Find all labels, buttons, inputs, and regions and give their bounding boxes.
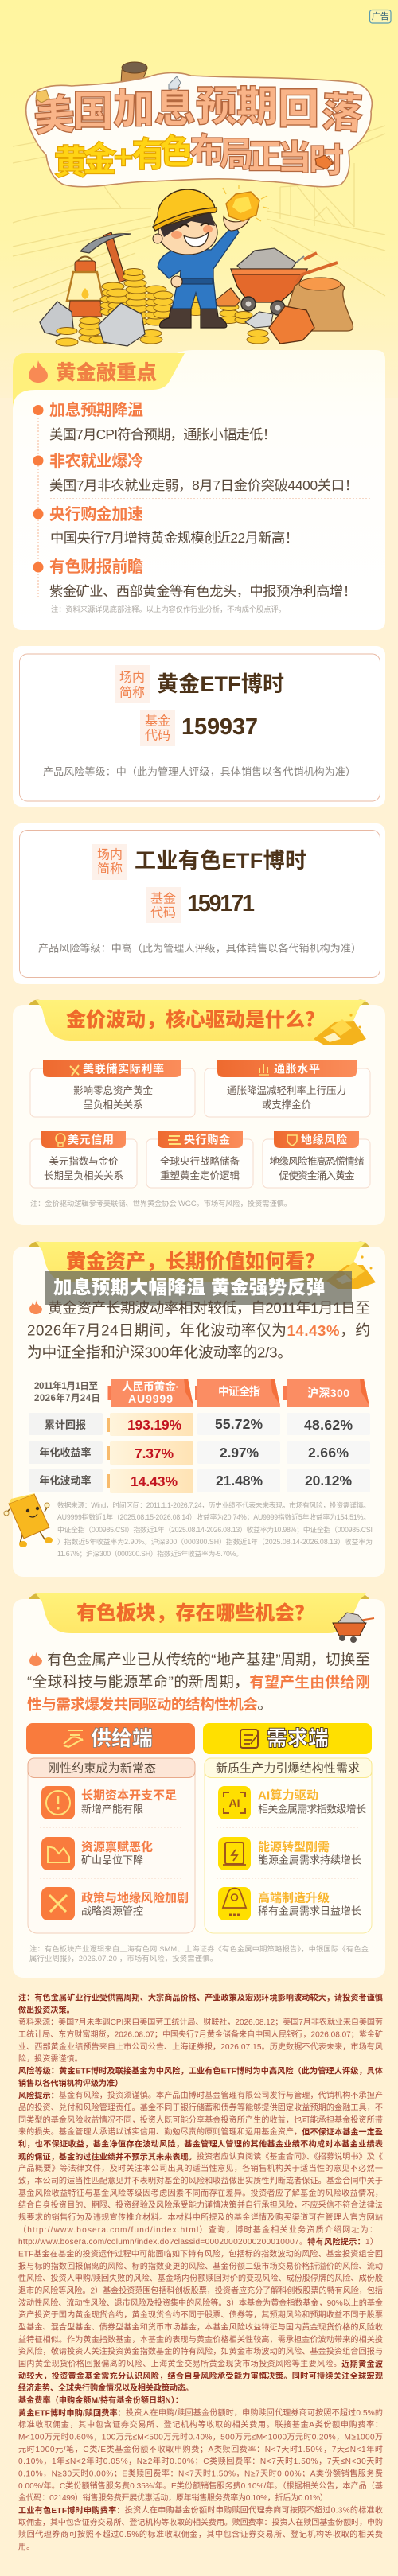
banner: nonferrous opportunities: 有色板块，存在哪些机会？	[76, 1601, 314, 1625]
ad tag	[369, 10, 391, 23]
demand item 2: 能源转型刚需	[258, 1839, 330, 1854]
driver: geopolitical risk: 地缘风险推高恐慌情绪	[269, 1155, 365, 1167]
row: annualized return: 7.37%	[135, 1446, 174, 1461]
row: annualized volatility: 21.48%	[216, 1473, 263, 1488]
short name: 场内	[119, 670, 145, 684]
title line 2	[54, 132, 344, 182]
driver: real interest rate: 影响零息资产黄金	[73, 1084, 153, 1096]
footer: disclosures and risk notes: 益特征相似。作为黄金指数基金，本基金的表现与黄金价格相关性较高，需承担金价波动带来的相关投	[18, 2334, 383, 2344]
driver: inflation	[205, 1060, 370, 1117]
title line 1: 息	[154, 86, 196, 132]
panel: long-term gold value	[4, 1242, 385, 1577]
driver: geopolitical risk: 促使资金涌入黄金	[279, 1169, 355, 1181]
row: cumulative return: 193.19%	[127, 1417, 181, 1433]
demand column	[203, 1723, 372, 1933]
driver: inflation: 通胀水平	[274, 1063, 320, 1076]
ad tag: 广告	[372, 11, 389, 21]
supply header	[26, 1723, 195, 1754]
icon: flame	[29, 1652, 42, 1666]
row: cumulative return	[29, 1413, 370, 1436]
footer: disclosures and risk notes: 规要求的销售行为及违规宣传推介材料。本材料中所提及的基金详情及购买渠道可在管理人官方网站	[18, 2212, 383, 2223]
demand list panel	[205, 1758, 372, 1933]
hero title sticker	[26, 62, 372, 187]
driver: central bank gold buying	[146, 1131, 253, 1188]
demand item 3: 高端制造升级	[258, 1890, 330, 1905]
row: annualized volatility: 14.43%	[131, 1473, 178, 1489]
supply list panel	[28, 1758, 195, 1933]
gold nugget	[223, 185, 269, 221]
footer: disclosures and risk notes: 国内黄金现货价格回报偏离的风险、上海黄金交易所黄金现货市场投资风险等主要风险。近期黄金波	[18, 2358, 383, 2369]
footer: disclosures and risk notes: 波动性风险、流动性风险、退市风险及投资集中的风险等。3）本基金为黄金指数基金，90%以上的基金	[18, 2298, 383, 2308]
title line 1: 落	[321, 90, 364, 138]
table header: CSI All Share	[195, 1379, 280, 1407]
supply list panel: 刚性约束成为新常态	[48, 1761, 156, 1776]
short name: 简称	[119, 686, 145, 700]
driver: central bank gold buying: 央行购金	[184, 1133, 230, 1146]
paragraph: structural opportunity: “全球科技与能源革命”的新周期，有望产生由供给刚	[27, 1674, 370, 1690]
miner body	[158, 224, 239, 309]
row: cumulative return: 48.62%	[304, 1417, 353, 1433]
demand header	[203, 1723, 372, 1754]
row: annualized volatility	[29, 1469, 370, 1493]
key point 3	[49, 504, 298, 546]
table header: AU9999: 人民币黄金·	[122, 1380, 179, 1393]
key points heading tab	[13, 353, 185, 409]
title line 2: 色	[159, 134, 194, 172]
row: annualized volatility: 年化波动率	[40, 1475, 91, 1486]
icon: ore cart	[333, 1613, 374, 1643]
footer: disclosures and risk notes: ETF基金在基金的投资运作过程中可能面临如下特有风险，包括标的指数波动的风险、基金投资组合回	[18, 2248, 383, 2259]
silver rock right	[245, 312, 273, 328]
drivers note: 注：金价驱动逻辑参考美联储、世界黄金协会 WGC。市场有风险，投资需谨慎。	[30, 1199, 291, 1208]
miner hand on hip	[171, 276, 182, 287]
banner: gold price drivers: 金价波动，核心驱动是什么？	[66, 1008, 325, 1031]
short name: 工业有色ETF博时	[135, 849, 306, 873]
footer: disclosures and risk notes: 资风险，敬请投资人关注投资黄金指数基金的特有风险，如黄金市场波动的风险、基金投资组合回报与	[18, 2346, 383, 2356]
footer: disclosures and risk notes: 0.10%，N≥30天时0.00%；E类赎回费率：N<7天时1.50%，N≥7天时0.00%；A类份额销售服务费	[18, 2468, 383, 2479]
title line 2: 有	[132, 136, 166, 174]
title line 1	[32, 84, 364, 141]
boots	[159, 306, 227, 328]
footer: disclosures and risk notes: 动较大，投资黄金基金需充分认识风险，结合自身风险承受能力审慎决策。同时可持续关注全球宏观	[18, 2371, 383, 2381]
mine cart with ore	[231, 248, 317, 315]
demand item 2	[218, 1837, 361, 1870]
footer: disclosures and risk notes: （http://www.bosera.com/fund/index.html）查询，博时基金相关业务资质介绍网址为：	[18, 2224, 377, 2235]
driver: geopolitical risk: 地缘风险	[301, 1133, 347, 1146]
table source note: 11.67%；沪深300（000300.SH）指数近5年收益率为-5.70%。	[57, 1549, 243, 1558]
title line 1: 回	[278, 87, 319, 133]
demand header: 需求端	[267, 1726, 329, 1750]
fund code	[146, 887, 255, 923]
lantern	[67, 256, 103, 317]
table source note: AU9999指数近1年（2025.08.15-2026.08.14）收益率为20.74%；AU9999指数近5年收益率为154.51%。	[57, 1512, 370, 1521]
sticker decoration: sack of ore	[121, 62, 158, 88]
supply item 1: 长期资本开支不足	[81, 1788, 177, 1803]
nonferrous note: 属行业周报》，2026.07.20 ，市场有风险，投资需谨慎。	[29, 1954, 217, 1963]
footer: disclosures and risk notes: 来的损失。基金管理人承诺以诚实信用、勤勉尽责的原则管理和运用基金资产，但不保证本基金一定盈	[18, 2127, 383, 2137]
fund code: 代码	[150, 905, 176, 920]
table source note	[57, 1500, 373, 1558]
footer: disclosures and risk notes: 注：有色金属矿业行业受供需周期、大宗商品价格、产业政策及宏观环境影响波动较大，请投资者谨慎	[18, 1992, 383, 2003]
footer: disclosures and risk notes: 黄金ETF博时申购/赎回费率：投资人在申购/赎回基金份额时，申购赎回代理券商可按照不超过0.5%的	[18, 2407, 383, 2418]
footer: disclosures and risk notes: 取佣金，其中包含证券交易所、登记机构等收取的相关费用。赎回费率：投资人在赎回基金份额时，申购	[18, 2517, 383, 2527]
title line 2: 正	[248, 138, 282, 177]
demand item 1: AI	[229, 1796, 240, 1809]
footer: disclosures and risk notes: 产品概要》等法律文件，及时关注本公司出具的适当性意见，各销售机构关于适当性的意见不必然一	[18, 2163, 383, 2173]
footer: disclosures and risk notes: 0.10%，1年≤N<2年时0.05%，N≥2年时0.00%；C类赎回费率：N<7天时1.50%，7天≤N<30天时	[18, 2456, 383, 2466]
footer: disclosures and risk notes: 经济走势、全球央行购金情况以及相关政策动态。	[18, 2383, 193, 2393]
table source note: ）指数近5年收益率为2.90%。沪深300（000300.SH）指数近1年（2025.08.14-2026.08.13）收益率为	[57, 1537, 373, 1546]
fund code: 基金	[145, 714, 170, 729]
paragraph: structural opportunity: 有色金属产业已从传统的“地产基建”周期，切换至	[47, 1652, 370, 1667]
short name: 场内	[97, 848, 123, 862]
comparison table	[29, 1379, 370, 1493]
fund code: 159937	[181, 714, 258, 740]
banner: long-term gold value	[29, 1242, 369, 1282]
driver: real interest rate: 美联储实际利率	[83, 1063, 164, 1076]
table period label	[34, 1380, 100, 1403]
title line 1: 预	[196, 84, 237, 130]
panel: nonferrous opportunities	[13, 1593, 385, 1978]
video caption overlay	[45, 1271, 352, 1305]
icon: flame	[29, 1300, 42, 1314]
footer: disclosures and risk notes: 基金风险收益特征与基金风险等级因考虑因素不同而存在差异。投资者应了解基金的风险收益情况，	[18, 2188, 383, 2198]
supply item 3: 战略资源管控	[81, 1905, 143, 1917]
key point 4: 有色财报前瞻	[49, 558, 143, 576]
title line 2: 黄	[54, 144, 88, 182]
short name: 简称	[97, 862, 123, 877]
table header: CSI All Share: 中证全指	[218, 1385, 260, 1398]
footer: disclosures and risk notes: 型基金、混合型基金、债券型基金和货币市场基金，本基金风险收益特征与国内黄金现货价格的风险收	[18, 2321, 383, 2333]
footer: disclosures and risk notes: 基金费率（申购金额M/持有基金份额日期N）：	[18, 2395, 183, 2406]
timeline	[33, 405, 43, 597]
key point 3: 央行购金加速	[49, 504, 143, 523]
table header: AU9999: AU9999	[128, 1392, 173, 1405]
short name	[92, 844, 306, 880]
driver: real interest rate: 呈负相关关系	[83, 1099, 143, 1111]
key point 3: 中国央行7月增持黄金规模创近22月新高！	[50, 530, 298, 546]
table source note: 数据来源：Wind，时间区间：2011.1.1-2026.7.24，历史业绩不代表未来表现，市场有风险，投资需谨慎。	[57, 1500, 370, 1509]
footer: disclosures and risk notes: 业、西部黄金业绩预告来自上市公司公告、上海证券报，2026.07.15。历史数据不代表未来，市场有风	[18, 2041, 383, 2052]
footer: disclosures and risk notes	[18, 1992, 383, 2552]
pickaxe	[80, 232, 131, 282]
row: cumulative return: 累计回报	[45, 1419, 86, 1430]
footer: disclosures and risk notes: 报与标的指数回报偏离的风险、标的指数变更的风险、基金份额二级市场交易价格折溢价的风险、流动	[18, 2261, 383, 2271]
demand item 1	[218, 1786, 366, 1819]
title line 2: 时	[309, 142, 344, 181]
paragraph: gold volatility: 为中证全指和沪深300年化波动率的2/3。	[27, 1344, 292, 1360]
supply item 2: 矿山品位下降	[81, 1854, 143, 1866]
footer: disclosures and risk notes: 致，本公司的适当性匹配意见并不表明对基金的风险和收益做出实质性判断或者保证。基金合同中关于	[18, 2175, 383, 2186]
orange gem	[269, 306, 314, 344]
key point 2	[49, 452, 358, 493]
title line 1: 加	[113, 87, 154, 133]
silver rock centre	[99, 303, 145, 346]
paragraph: gold volatility	[27, 1300, 370, 1360]
row: annualized return	[29, 1441, 370, 1465]
footer: disclosures and risk notes: 元时1000元/笔，C类/E类基金份额不收取申购费；A类赎回费率：N<7天时1.50%，7天≤N<1年时	[18, 2444, 383, 2454]
key point 4	[49, 558, 357, 599]
risk level: 产品风险等级：中（此为管理人评级，具体销售以各代销机构为准）	[43, 765, 356, 778]
row: annualized volatility: 20.12%	[305, 1473, 352, 1488]
supply item 1	[41, 1786, 177, 1819]
gold bars pile	[326, 1255, 376, 1289]
hero illustration: miner with gold, coins and cart	[40, 185, 353, 346]
footer: disclosures and risk notes: 标准收取佣金，其中包含证券交易所、登记机构等收取的相关费用。联接基金A类份额申购费率：	[18, 2419, 383, 2430]
footer: disclosures and risk notes: M<100万元时0.60%，100万元≤M<500万元时0.40%，500万元≤M<1000万元时0.20%，M≥1000万	[18, 2433, 383, 2442]
row: annualized return: 2.97%	[220, 1445, 259, 1461]
banner: nonferrous opportunities	[29, 1593, 369, 1633]
table header: CSI 300	[283, 1379, 369, 1407]
video caption overlay: 加息预期大幅降温 黄金强势反弹	[53, 1276, 325, 1298]
fund code	[140, 710, 258, 746]
key points note: 注：资料来源详见底部注释。以上内容仅作行业分析，不构成个股点评。	[51, 605, 286, 613]
nonferrous note: 注：有色板块产业逻辑来自上海有色网 SMM、上海证券《有色金属中期策略报告》，中银国际《有色金	[29, 1944, 369, 1953]
paragraph: structural opportunity: 性与需求爆发共同驱动的结构性机会。	[27, 1696, 272, 1712]
footer: disclosures and risk notes: 品的投资、兑付和风险管理责任。基金不同于银行储蓄和债券等能够提供固定收益预期的金融工具，不	[18, 2102, 383, 2113]
supply item 2	[41, 1837, 153, 1870]
driver: central bank gold buying: 全球央行战略储备	[160, 1155, 240, 1167]
key point 2: 非农就业爆冷	[49, 452, 143, 470]
miner head	[153, 210, 217, 255]
miner right hand	[224, 216, 250, 231]
driver: dollar credit: 美元信用	[68, 1133, 114, 1146]
table period label: 2026年7月24日	[34, 1392, 100, 1403]
key point 1	[49, 400, 276, 442]
title line 1: 美	[32, 91, 76, 141]
panel: gold key points	[13, 350, 385, 630]
driver: geopolitical risk	[263, 1131, 370, 1188]
footer: disclosures and risk notes: http://www.bosera.com/column/index.do?classid=00020002000200010007。特有风险提示：1）	[18, 2236, 378, 2247]
footer: disclosures and risk notes: 赎回代理券商可按照不超过0.5%的标准收取佣金，其中包含证券交易所、登记机构等收取的相关费	[18, 2529, 383, 2539]
supply item 2: 资源禀赋恶化	[81, 1839, 153, 1854]
supply item 3	[41, 1887, 189, 1920]
driver: inflation: 或支撑金价	[262, 1099, 311, 1111]
driver: central bank gold buying: 重塑黄金定价逻辑	[160, 1169, 240, 1181]
driver: dollar credit	[30, 1131, 137, 1188]
key point 1: 美国7月CPI符合预期，通胀小幅走低！	[49, 426, 276, 442]
fund code: 159171	[187, 891, 255, 916]
supply column	[26, 1723, 195, 1933]
footer: disclosures and risk notes: 资料来源：美国7月未季调CPI来自美国劳工统计局、财联社，2026.08.12；美国7月非农就业来自美国劳	[18, 2017, 383, 2027]
footer: disclosures and risk notes: 工业有色ETF博时申购费率：投资人在申购基金份额时申购赎回代理券商可按照不超过0.3%的标准收	[18, 2504, 383, 2516]
short name	[115, 665, 284, 703]
coin stacks	[56, 269, 269, 346]
row: annualized return: 年化收益率	[40, 1446, 91, 1459]
footer: disclosures and risk notes: 性风险、投资人申购/赎回失败的风险、基金场内份额赎回对价的变现风险、成份股停牌的风险、成份股	[18, 2273, 383, 2283]
footer: disclosures and risk notes: 风险提示：基金有风险，投资须谨慎。本产品由博时基金管理有限公司发行与管理，代销机构不承担产	[18, 2090, 383, 2100]
demand item 3: 稀有金属需求日益增长	[258, 1905, 361, 1917]
footer: disclosures and risk notes: 退市的风险等风险。2）基金投资范围包括科创板股票，投资者应充分了解科创板股票的特有风险，包括	[18, 2285, 383, 2296]
footer: disclosures and risk notes: 销售以各代销机构评级为准）	[18, 2078, 123, 2088]
supply item 3: 政策与地缘风险加剧	[81, 1890, 189, 1905]
sticker decoration: nuggets	[36, 76, 333, 169]
footer: disclosures and risk notes: 工统计局、东方财富期货，2026.08.07；中国央行7月黄金储备来自中国人民银行，2026.08.07；紫金矿	[18, 2029, 383, 2040]
gold bars pile	[314, 1014, 366, 1045]
table header: AU9999	[108, 1379, 193, 1407]
footer: disclosures and risk notes: 做出投资决策。	[18, 2005, 75, 2015]
key point 4: 紫金矿业、西部黄金等有色龙头，中报预净利高增！	[49, 583, 357, 599]
footer: disclosures and risk notes: 风险等级：黄金ETF博时及联接基金为中风险，工业有色ETF博时为中高风险（此为管理人评级，具体	[18, 2065, 383, 2076]
demand item 1: AI算力驱动	[258, 1788, 318, 1803]
footer: disclosures and risk notes: 利，也不保证收益，基金净值存在波动风险，基金管理人管理的其他基金业绩不构成对本基金业绩表	[18, 2138, 383, 2150]
footer: disclosures and risk notes: 资产投资于国内黄金现货合约，黄金现货合约不同于股票、债券等，其预期风险和预期收益不同于股票	[18, 2309, 383, 2320]
footer: disclosures and risk notes: 用。	[18, 2543, 34, 2552]
title line 1: 期	[236, 84, 278, 130]
silver rock left	[40, 302, 73, 336]
supply header: 供给端	[91, 1726, 153, 1750]
title line 2: +	[113, 138, 134, 177]
panel: gold price drivers	[13, 1000, 385, 1225]
title line 2: 局	[220, 136, 253, 174]
fund code: 代码	[145, 729, 170, 743]
paragraph: gold volatility: 2026年7月24日期间，年化波动率仅为14.43%，约	[27, 1322, 370, 1338]
paragraph: gold volatility: 黄金资产长期波动率相对较低，自2011年1月1日至	[48, 1300, 370, 1316]
nonferrous note	[29, 1944, 369, 1963]
key point 2: 美国7月非农就业走弱，8月7日金价突破4400关口！	[49, 477, 358, 493]
table source note: 中证全指（000985.CSI）指数近1年（2025.08.14-2026.08.13）收益率为10.98%；中证全指（000985.CSI	[57, 1525, 373, 1534]
driver: real interest rate	[30, 1060, 195, 1117]
title line 1: 国	[72, 89, 114, 135]
demand item 3	[218, 1887, 361, 1920]
footer: disclosures and risk notes: 结合自身投资目的、期限、投资经验及风险承受能力谨慎决策并自行承担风险，不应采信不符合法律法	[18, 2200, 383, 2210]
miner helmet	[153, 189, 217, 231]
driver: dollar credit: 美元指数与金价	[49, 1155, 119, 1167]
demand list panel: 新质生产力引爆结构性需求	[216, 1761, 360, 1776]
title line 2: 布	[189, 132, 224, 170]
short name: 黄金ETF博时	[157, 672, 284, 696]
table header: CSI 300: 沪深300	[307, 1387, 349, 1399]
footer: disclosures and risk notes: 险，投资需谨慎。	[18, 2053, 83, 2064]
key points heading tab: 黄金敲重点	[56, 361, 157, 384]
panel: nonferrous ETF product card	[13, 823, 385, 984]
fund code: 基金	[150, 891, 176, 905]
title line 2: 金	[83, 141, 116, 179]
demand item 1: 相关金属需求指数级增长	[258, 1803, 366, 1815]
sack with orange ore	[287, 263, 353, 331]
background line art: mine scene	[13, 126, 385, 312]
footer: disclosures and risk notes: 金代码：021499）销售服务费开展优惠活动，原年销售服务费率为0.10%，折后为0.01%）	[18, 2492, 328, 2503]
table period label: 2011年1月1日至	[34, 1380, 98, 1391]
row: annualized return: 2.66%	[308, 1445, 349, 1461]
gold bar mascot	[4, 1493, 53, 1547]
supply item 1: 新增产能有限	[81, 1803, 143, 1815]
driver: dollar credit: 长期呈负相关关系	[44, 1170, 123, 1181]
driver: inflation: 通胀降温减轻利率上行压力	[227, 1084, 346, 1096]
banner: long-term gold value: 黄金资产，长期价值如何看？	[66, 1250, 325, 1273]
risk level: 产品风险等级：中高（此为管理人评级，具体销售以各代销机构为准）	[38, 942, 361, 955]
footer: disclosures and risk notes: 0.00%/年。C类份额销售服务费0.35%/年。E类份额销售服务费0.10%/年。（根据相关公告，本产品（基	[18, 2481, 383, 2491]
row: cumulative return: 55.72%	[215, 1416, 263, 1432]
demand item 2: 能源金属需求持续增长	[258, 1854, 361, 1866]
banner: gold price drivers	[29, 1000, 369, 1041]
title line 2: 当	[277, 139, 312, 177]
orange rock	[215, 288, 240, 306]
paragraph: structural opportunity	[27, 1652, 370, 1712]
panel: gold ETF product card	[13, 646, 385, 807]
key point 1: 加息预期降温	[49, 400, 143, 419]
footer: disclosures and risk notes: 同类型的基金风险收益情况不同，投资人既可能分享基金投资所产生的收益，也可能承担基金投资所带	[18, 2115, 383, 2125]
footer: disclosures and risk notes: 现的保证，基金的过往业绩并不预示其未来表现。投资者应认真阅读《基金合同》、《招募说明书》及《	[18, 2151, 383, 2162]
